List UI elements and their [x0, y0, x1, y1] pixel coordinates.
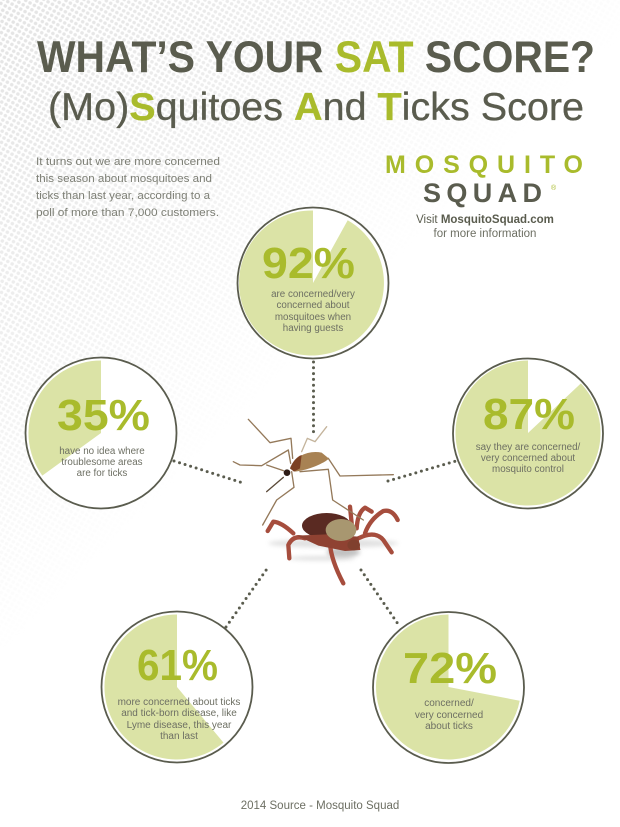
- logo: Mosquito Squad: SQUAD: [423, 178, 542, 208]
- stat circle: 35%: troublesome areas: [61, 457, 143, 468]
- stat circle: 92%: are concerned/very: [271, 289, 355, 300]
- stat circle: 72%: 72%: [403, 644, 497, 693]
- source footer: 2014 Source - Mosquito Squad: [241, 800, 399, 812]
- stat circle: 72%: about ticks: [425, 721, 473, 732]
- website call to action: Visit MosquitoSquad.com: [416, 214, 554, 226]
- intro text: this season about mosquitoes and: [36, 173, 212, 185]
- stat circle: 92%: concerned about: [276, 300, 350, 311]
- stat circle: 72%: concerned/: [424, 698, 474, 709]
- stat circle: 61%: than last: [160, 731, 198, 742]
- stat circle: 61%: more concerned about ticks: [118, 697, 240, 708]
- logo: Mosquito Squad: ®: [551, 184, 557, 192]
- stat circle: 92%: having guests: [283, 323, 343, 334]
- subtitle: (Mo)Squitoes And Ticks Score: [48, 86, 584, 129]
- website call to action: [416, 214, 554, 240]
- connector lines: [174, 362, 456, 627]
- illustration: tick: [268, 507, 398, 583]
- stat circle: 87%: [453, 358, 603, 508]
- stat circle: 35%: are for ticks: [77, 468, 127, 479]
- intro text: poll of more than 7,000 customers.: [36, 207, 219, 219]
- stat circle: 92%: 92%: [262, 239, 355, 288]
- stat circle: 87%: say they are concerned/: [476, 442, 581, 453]
- stat circle: 35%: 35%: [57, 391, 150, 440]
- stat circle: 61%: and tick-born disease, like: [121, 708, 237, 719]
- stat circle: 35%: [26, 358, 176, 508]
- stat circle: 92%: [238, 208, 388, 358]
- logo: Mosquito Squad: MOSQUITO: [385, 151, 583, 179]
- illustration: mosquito: [233, 419, 393, 525]
- title: WHAT’S YOUR SAT SCORE?: [37, 33, 595, 82]
- stat circle: 72%: [373, 612, 524, 763]
- stat circle: 35%: have no idea where: [59, 446, 145, 457]
- intro text: It turns out we are more concerned: [36, 156, 220, 168]
- stat circle: 87%: very concerned about: [481, 453, 575, 464]
- intro text: ticks than last year, according to a: [36, 190, 211, 202]
- stat circle: 72%: very concerned: [415, 710, 483, 721]
- intro text: [36, 156, 220, 219]
- website call to action: for more information: [434, 228, 536, 240]
- stat circle: 87%: 87%: [483, 390, 575, 439]
- stat circle: 61%: Lyme disease, this year: [127, 720, 232, 731]
- stat circle: 61%: [102, 612, 252, 762]
- stat circle: 61%: 61%: [137, 641, 218, 690]
- logo: Mosquito Squad: [385, 151, 583, 208]
- stat circle: 87%: mosquito control: [492, 464, 564, 475]
- stat circle: 92%: mosquitoes when: [275, 312, 351, 323]
